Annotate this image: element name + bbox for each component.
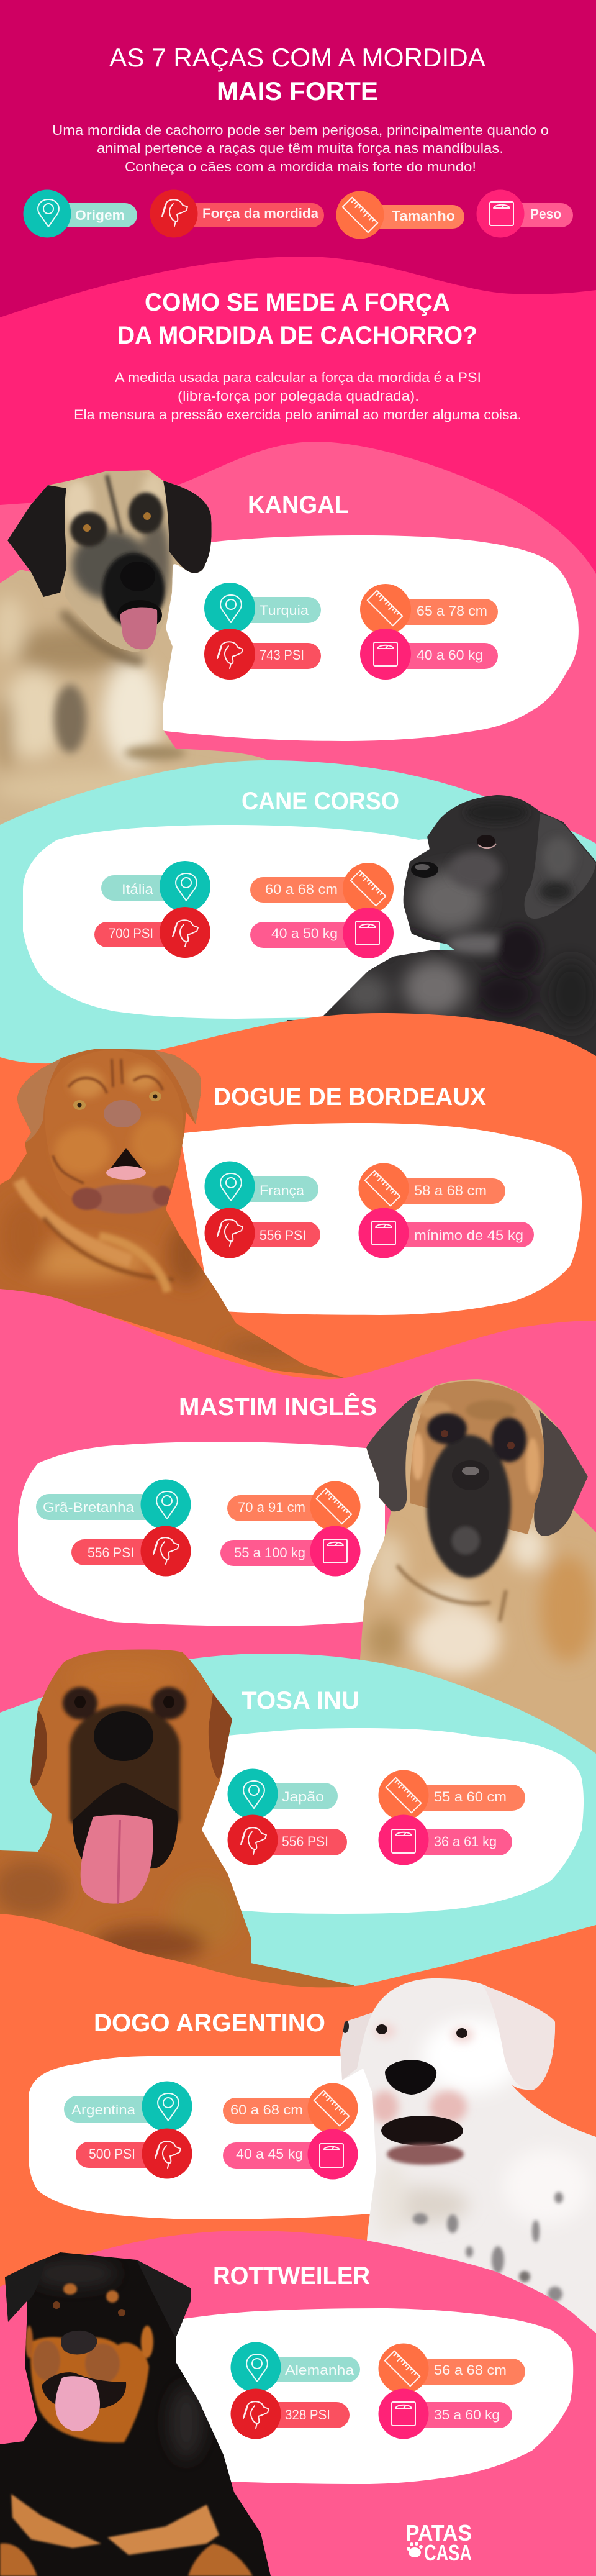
stat: Cane Corso origem <box>101 861 210 912</box>
stat: Rottweiler tamanho <box>379 2343 525 2394</box>
stat: Kangal força <box>204 629 321 680</box>
heading: Dogue de Bordeaux: DOGUE DE BORDEAUX <box>214 1083 486 1111</box>
stat: Dogo força: 500 PSI <box>89 2146 135 2162</box>
panel: Dogue de Bordeaux <box>180 1123 582 1315</box>
stat: Dogue tamanho: 58 a 68 cm <box>414 1183 487 1198</box>
stat: Cane Corso força: 700 PSI <box>109 926 153 941</box>
explanation text: (libra-força por polegada quadrada). <box>178 388 419 404</box>
legend: origem: Origem <box>75 207 125 223</box>
intro text: Uma mordida de cachorro pode ser bem perigosa, principalmente quando o <box>52 122 549 138</box>
stat: Dogo origem <box>64 2081 192 2132</box>
stat: Rottweiler origem: Alemanha <box>285 2362 354 2378</box>
photo: Mastim Inglês dog <box>354 1373 596 1777</box>
background: magenta header <box>0 0 596 348</box>
stat: Mastim origem <box>36 1480 191 1529</box>
explanation text: Ela mensura a pressão exercida pelo animal ao morder alguma coisa. <box>74 407 522 422</box>
panel: Rottweiler <box>168 2308 573 2484</box>
intro text <box>52 122 549 175</box>
heading: Rottweiler: ROTTWEILER <box>213 2262 370 2290</box>
stat: Kangal peso <box>360 629 498 680</box>
stat: Kangal força: 743 PSI <box>260 647 304 663</box>
stat: Dogue força <box>205 1208 320 1258</box>
photo: Dogo Argentino dog <box>335 1975 596 2348</box>
stat: Dogue peso: mínimo de 45 kg <box>414 1227 523 1243</box>
wave: hot pink section <box>0 257 596 621</box>
stat: Dogo tamanho: 60 a 68 cm <box>230 2102 303 2118</box>
stat: Dogo força <box>76 2128 192 2179</box>
stat: Dogue origem <box>205 1162 318 1211</box>
stat: Rottweiler força <box>231 2389 350 2439</box>
heading: Mastim Inglês: MASTIM INGLÊS <box>179 1392 377 1421</box>
stat: Tosa origem: Japão <box>282 1789 324 1805</box>
intro text: Conheça o cães com a mordida mais forte do mundo! <box>125 159 476 175</box>
stat: Dogo peso <box>223 2129 358 2179</box>
photo: Rottweiler dog <box>0 2249 273 2576</box>
stat: Mastim força: 556 PSI <box>88 1545 134 1560</box>
legend <box>24 190 573 239</box>
panel: Cane Corso <box>23 825 447 1019</box>
stat: Cane Corso peso: 40 a 50 kg <box>271 926 338 941</box>
title <box>109 43 485 106</box>
wave: pink Mastim section <box>0 1289 596 1801</box>
stat: Rottweiler peso: 35 a 60 kg <box>434 2407 500 2423</box>
stat: Kangal tamanho: 65 a 78 cm <box>417 603 487 619</box>
stat: Dogue força: 556 PSI <box>260 1227 306 1243</box>
heading: como se mede: COMO SE MEDE A FORÇA <box>145 289 450 316</box>
stat: Dogo peso: 40 a 45 kg <box>236 2146 303 2162</box>
wave: light pink Kangal section <box>0 442 596 870</box>
stat: Rottweiler peso <box>379 2389 512 2439</box>
stat: Mastim origem: Grã-Bretanha <box>43 1500 135 1515</box>
panel: Tosa Inu <box>199 1728 584 1914</box>
wave: orange Dogue section <box>0 1013 596 1404</box>
stat: Tosa origem <box>227 1769 338 1819</box>
explanation text: A medida usada para calcular a força da mordida é a PSI <box>115 370 481 385</box>
legend: tamanho: Tamanho <box>392 208 455 224</box>
stat: Dogue tamanho <box>359 1163 505 1214</box>
stat: Kangal origem: Turquia <box>260 603 309 618</box>
stat: Tosa tamanho: 55 a 60 cm <box>434 1789 507 1805</box>
intro text: animal pertence a raças que têm muita força nas mandíbulas. <box>97 140 503 156</box>
stat: Tosa peso <box>379 1815 512 1865</box>
legend: peso: Peso <box>530 206 561 222</box>
stat: Mastim força <box>71 1526 191 1577</box>
stat: Dogue peso <box>359 1208 534 1258</box>
panel: Kangal <box>155 535 579 741</box>
stat: Kangal peso: 40 a 60 kg <box>417 647 483 663</box>
stat: Tosa peso: 36 a 61 kg <box>434 1834 497 1849</box>
heading: Cane Corso: CANE CORSO <box>242 788 399 815</box>
photo: Kangal dog <box>0 466 273 832</box>
wave: orange Dogo section <box>0 1914 596 2360</box>
heading: Dogo Argentino: DOGO ARGENTINO <box>94 2009 325 2037</box>
legend: tamanho <box>336 191 464 239</box>
legend: força da mordida: Força da mordida <box>202 206 319 221</box>
stat: Tosa força: 556 PSI <box>282 1834 328 1849</box>
heading: como se mede: DA MORDIDA DE CACHORRO? <box>117 322 477 349</box>
photo: Dogue de Bordeaux dog <box>0 1044 354 1385</box>
stat: Cane Corso força <box>94 907 210 958</box>
stat: Rottweiler força: 328 PSI <box>285 2407 330 2423</box>
stat: Cane Corso origem: Itália <box>122 881 154 897</box>
panel: Mastim Inglês <box>18 1442 385 1626</box>
stat: Cane Corso peso <box>250 908 394 958</box>
wave: teal Cane Corso section <box>0 760 596 1093</box>
stat: Tosa tamanho <box>379 1770 525 1820</box>
title: AS 7 RAÇAS COM A MORDIDA <box>109 43 485 72</box>
stat: Tosa força <box>227 1815 347 1865</box>
stat: Mastim tamanho <box>227 1481 360 1532</box>
logo: Patas da Casa: PATAS <box>405 2520 472 2546</box>
stat: Mastim peso <box>220 1526 360 1577</box>
wave: teal Tosa section <box>0 1654 596 2025</box>
stat: Cane Corso tamanho: 60 a 68 cm <box>265 881 338 897</box>
wave: pink Rottweiler section <box>0 2231 596 2576</box>
heading: Tosa Inu: TOSA INU <box>242 1687 359 1714</box>
panel: Dogo Argentino <box>29 2056 385 2219</box>
stat: Mastim tamanho: 70 a 91 cm <box>238 1500 305 1515</box>
stat: Rottweiler origem <box>231 2342 360 2393</box>
legend: peso <box>477 190 573 237</box>
heading: Kangal: KANGAL <box>248 491 349 519</box>
stat: Kangal origem <box>204 583 321 634</box>
logo: Patas da Casa: CASA <box>424 2540 472 2565</box>
title: MAIS FORTE <box>217 76 378 106</box>
stat: Rottweiler tamanho: 56 a 68 cm <box>434 2362 507 2378</box>
legend: força da mordida <box>150 190 324 237</box>
legend: origem <box>24 190 137 237</box>
stat: Dogo origem: Argentina <box>71 2102 136 2118</box>
heading: como se mede <box>117 289 477 349</box>
stat: Mastim peso: 55 a 100 kg <box>234 1545 305 1560</box>
stat: Kangal tamanho <box>360 584 498 635</box>
photo: Tosa Inu dog <box>0 1650 354 1988</box>
explanation text <box>74 370 522 422</box>
stat: Cane Corso tamanho <box>250 863 394 914</box>
stat: Dogo tamanho <box>223 2083 358 2133</box>
photo: Cane Corso dog <box>286 789 596 1068</box>
logo: Patas da Casa <box>405 2520 472 2565</box>
stat: Dogue origem: França <box>260 1183 305 1198</box>
